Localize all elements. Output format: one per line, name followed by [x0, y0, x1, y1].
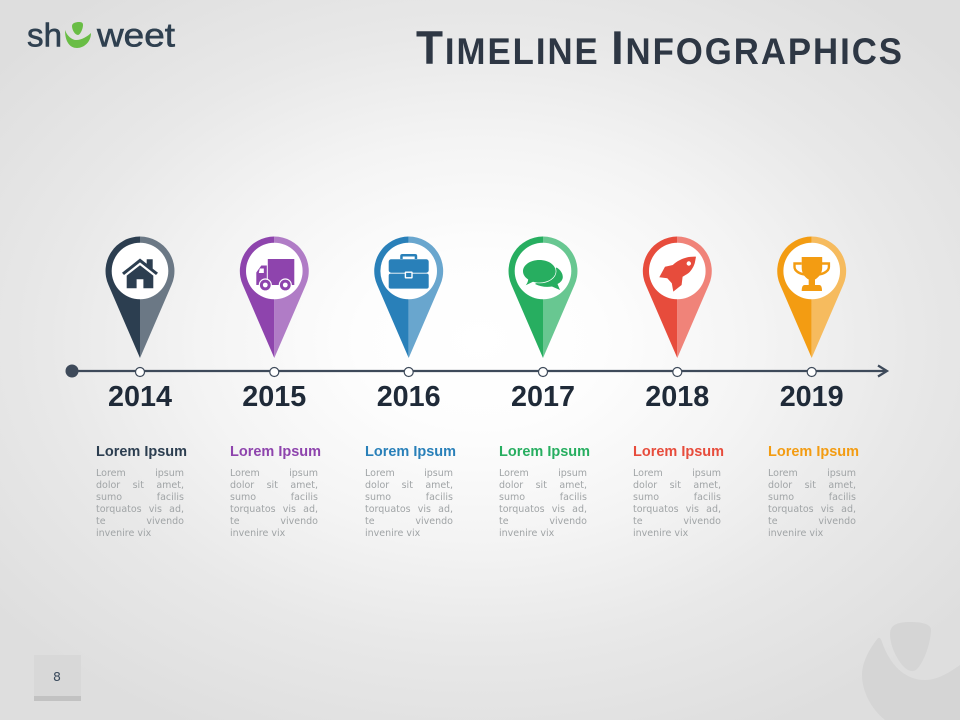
logo: weet	[96, 16, 175, 54]
column headings: Lorem Ipsum	[230, 443, 321, 460]
year labels: 2016	[377, 381, 441, 413]
text block 2019	[768, 468, 856, 539]
text block 2014: sumo facilis	[96, 492, 184, 503]
text block 2016: Lorem ipsum	[365, 468, 453, 479]
icon: trophy	[794, 257, 829, 291]
logo	[27, 16, 175, 54]
column headings: Lorem Ipsum	[768, 443, 859, 460]
timeline markers	[136, 368, 816, 376]
text block 2015: te vivendo	[230, 516, 318, 527]
title: TIMELINE INFOGRAPHICS	[416, 22, 902, 74]
icon: briefcase	[389, 254, 429, 289]
pin 2017: chat bubbles	[509, 236, 577, 358]
column headings: Lorem Ipsum	[365, 443, 456, 460]
year labels: 2014	[108, 381, 172, 413]
text block 2015: torquatos vis ad,	[230, 504, 318, 515]
text block 2016: te vivendo	[365, 516, 453, 527]
page number box	[34, 655, 81, 701]
text block 2015: sumo facilis	[230, 492, 318, 503]
text block 2019: sumo facilis	[768, 492, 856, 503]
text block 2015	[230, 468, 318, 539]
text block 2017: te vivendo	[499, 516, 587, 527]
text block 2016: dolor sit amet,	[365, 480, 453, 491]
text block 2014: Lorem ipsum	[96, 468, 184, 479]
timeline axis with arrow	[66, 364, 887, 378]
column headings: Lorem Ipsum	[499, 443, 590, 460]
text block 2014: te vivendo	[96, 516, 184, 527]
text block 2014	[96, 468, 184, 539]
text block 2018	[633, 468, 721, 539]
icon: rocket	[659, 257, 696, 292]
text block 2019: torquatos vis ad,	[768, 504, 856, 515]
text block 2019: dolor sit amet,	[768, 480, 856, 491]
text block 2017: invenire vix	[499, 528, 554, 539]
text block 2018: sumo facilis	[633, 492, 721, 503]
text block 2016: sumo facilis	[365, 492, 453, 503]
text block 2016: invenire vix	[365, 528, 420, 539]
text block 2015: Lorem ipsum	[230, 468, 318, 479]
text block 2018: torquatos vis ad,	[633, 504, 721, 515]
icon: truck	[256, 259, 294, 291]
text block 2019: Lorem ipsum	[768, 468, 856, 479]
text block 2015: invenire vix	[230, 528, 285, 539]
text block 2018: invenire vix	[633, 528, 688, 539]
column headings: Lorem Ipsum	[96, 443, 187, 460]
text block 2019: te vivendo	[768, 516, 856, 527]
text block 2017	[499, 468, 587, 539]
icon: chat bubbles	[523, 260, 563, 290]
column headings: Lorem Ipsum	[633, 443, 724, 460]
text block 2017: dolor sit amet,	[499, 480, 587, 491]
text block 2016: torquatos vis ad,	[365, 504, 453, 515]
text block 2016	[365, 468, 453, 539]
page number box: 8	[53, 669, 61, 684]
text block 2018: te vivendo	[633, 516, 721, 527]
column headings	[96, 443, 859, 460]
pin 2016: briefcase	[374, 236, 443, 358]
text block 2015: dolor sit amet,	[230, 480, 318, 491]
text block 2017: sumo facilis	[499, 492, 587, 503]
text block 2017: Lorem ipsum	[499, 468, 587, 479]
pin 2019: trophy	[777, 236, 846, 358]
pin 2018: rocket	[643, 236, 712, 358]
year labels	[108, 381, 844, 413]
text block 2019: invenire vix	[768, 528, 823, 539]
logo: sh	[27, 16, 62, 54]
icon: house	[122, 258, 158, 288]
text block 2018: Lorem ipsum	[633, 468, 721, 479]
text block 2014: torquatos vis ad,	[96, 504, 184, 515]
year labels: 2015	[242, 381, 306, 413]
text block 2017: torquatos vis ad,	[499, 504, 587, 515]
text block 2014: invenire vix	[96, 528, 151, 539]
year labels: 2019	[780, 381, 844, 413]
year labels: 2018	[645, 381, 709, 413]
text block 2018: dolor sit amet,	[633, 480, 721, 491]
year labels: 2017	[511, 381, 575, 413]
pin 2014: house	[106, 236, 174, 358]
watermark logo	[862, 622, 960, 720]
pin 2015: truck	[240, 236, 309, 358]
text block 2014: dolor sit amet,	[96, 480, 184, 491]
